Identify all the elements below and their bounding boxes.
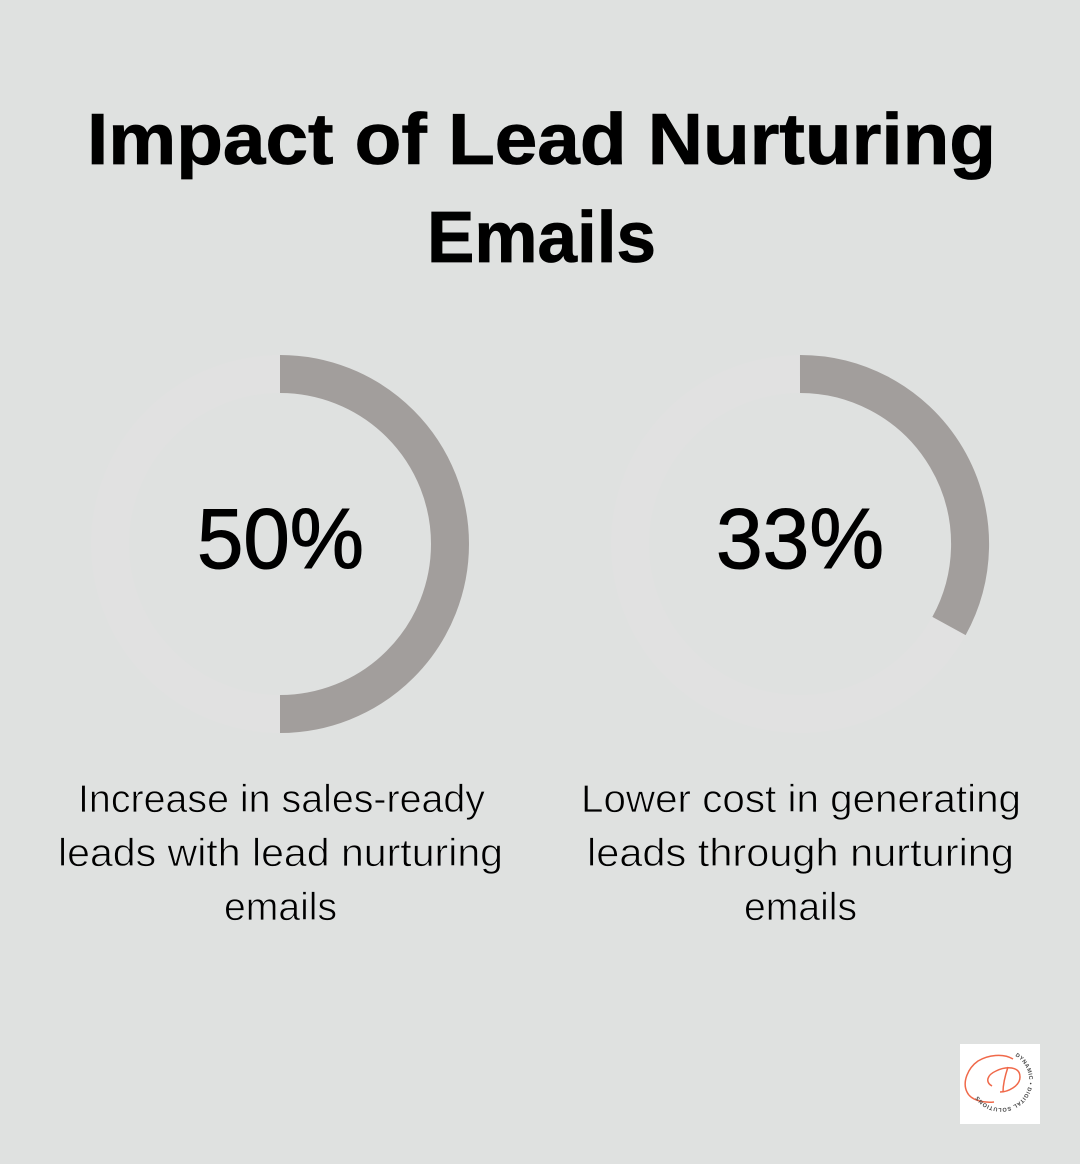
value: 33%: 33% bbox=[716, 492, 884, 587]
logo: Dynamic Digital Solutions: DYNAMIC • DIGITAL SOLUTIONS bbox=[976, 1052, 1033, 1112]
donut chart: 33% bbox=[630, 374, 970, 714]
logo: Dynamic Digital Solutions bbox=[960, 1044, 1040, 1124]
description: sales-ready leads: Increase in sales-ready bbox=[78, 778, 485, 821]
title: Impact of Lead Nurturing bbox=[87, 100, 996, 180]
panel: 33% stat bbox=[581, 374, 1021, 929]
description: lower cost bbox=[581, 778, 1021, 929]
title bbox=[87, 100, 996, 278]
donut chart: 50% bbox=[110, 374, 450, 714]
description: sales-ready leads bbox=[58, 778, 503, 929]
value: 50%: 50% bbox=[197, 492, 364, 587]
description: lower cost: Lower cost in generating bbox=[581, 778, 1021, 821]
description: lower cost: emails bbox=[744, 886, 857, 929]
title: Emails bbox=[427, 198, 656, 278]
description: sales-ready leads: emails bbox=[224, 886, 337, 929]
description: lower cost: leads through nurturing bbox=[587, 832, 1014, 875]
description: sales-ready leads: leads with lead nurturing bbox=[58, 832, 503, 875]
panel: 50% stat bbox=[58, 374, 503, 929]
